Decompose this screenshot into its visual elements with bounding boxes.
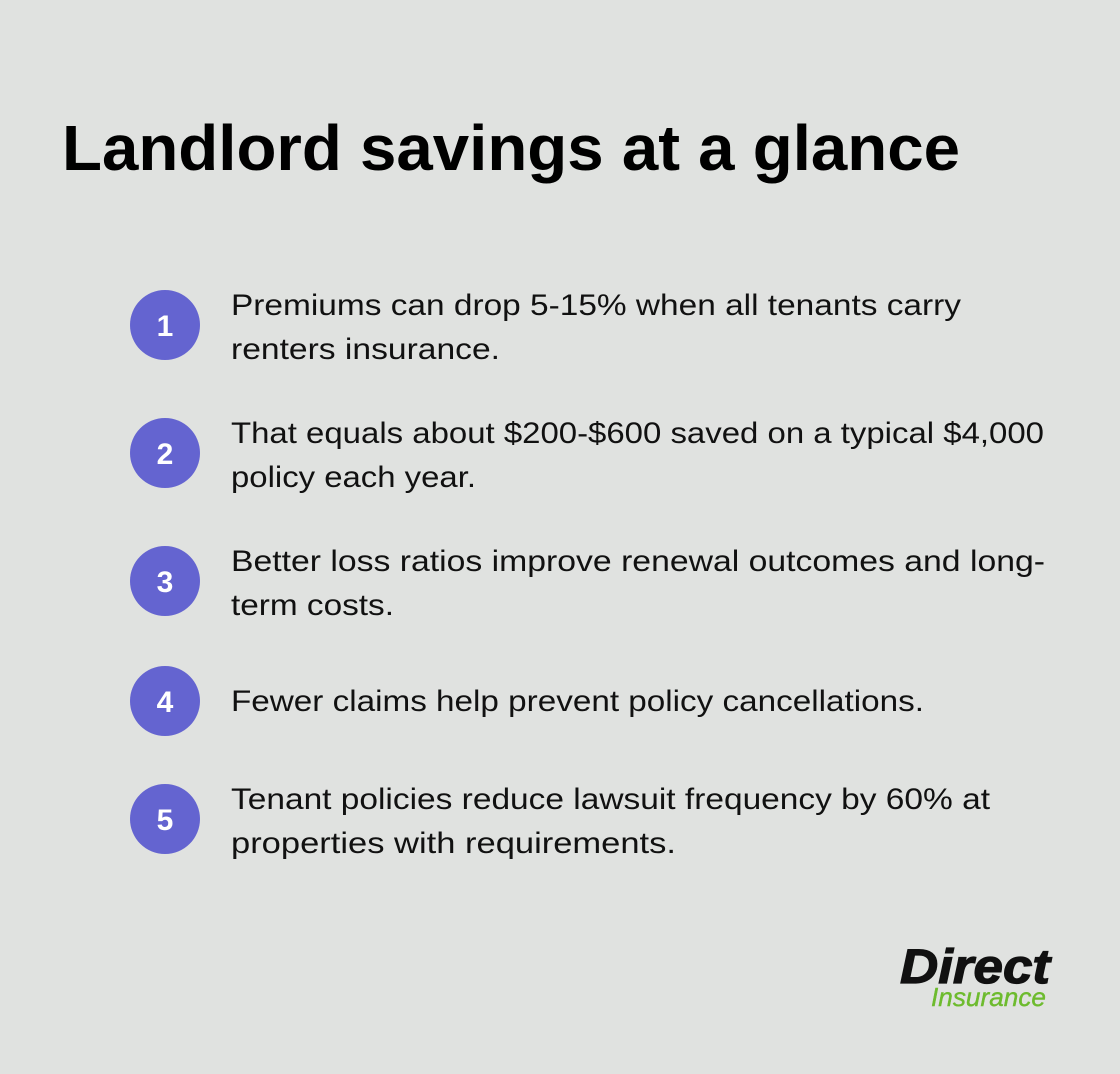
item 2: 2 [157, 438, 173, 471]
title: Landlord savings at a glance [62, 112, 960, 184]
item 5: 5 [157, 804, 173, 837]
item 1: 1 [157, 310, 173, 343]
item 2: That equals about $200-$600 saved on a typical $4,000 [231, 417, 1044, 450]
item 4: 4 [157, 686, 174, 719]
item 1 [130, 289, 961, 366]
item 3: term costs. [231, 589, 394, 622]
logo: Direct Insurance: Insurance [931, 982, 1046, 1012]
item 5: properties with requirements. [231, 827, 676, 860]
item 1: renters insurance. [231, 333, 500, 366]
logo: Direct Insurance: Direct [900, 941, 1052, 994]
list: savings items [130, 289, 1045, 860]
item 2 [130, 417, 1044, 494]
item 1: Premiums can drop 5-15% when all tenants carry [231, 289, 961, 322]
item 2: policy each year. [231, 461, 476, 494]
item 3: 3 [157, 566, 173, 599]
logo: Direct Insurance [900, 941, 1052, 1012]
item 5: Tenant policies reduce lawsuit frequency by 60% at [231, 783, 991, 816]
item 4: Fewer claims help prevent policy cancellations. [231, 685, 924, 718]
item 3 [130, 545, 1045, 622]
item 4 [130, 666, 924, 736]
item 5 [130, 783, 991, 860]
item 3: Better loss ratios improve renewal outcomes and long- [231, 545, 1045, 578]
